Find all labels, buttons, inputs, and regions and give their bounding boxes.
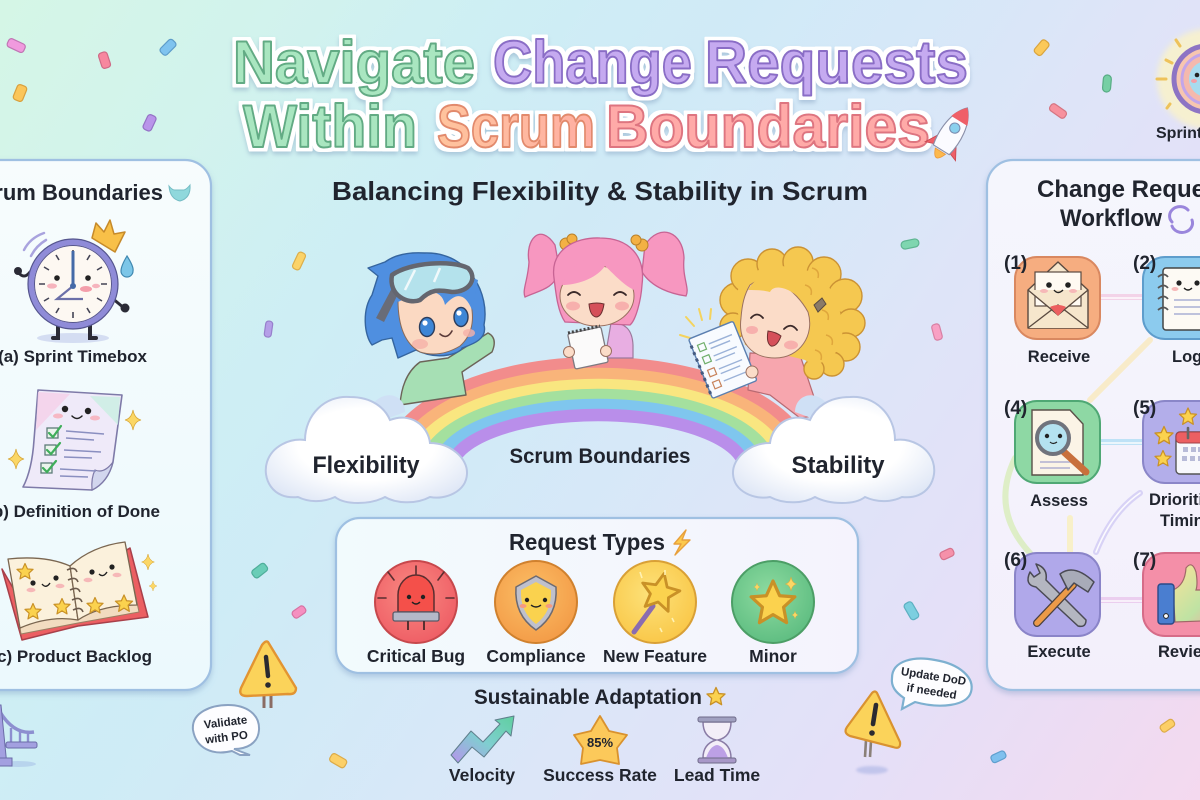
label: sprint timebox: (a) Sprint Timebox	[0, 347, 148, 366]
title: Change	[493, 29, 692, 96]
step 5: prioritize timing	[1133, 398, 1200, 530]
label: New Feature	[603, 646, 707, 666]
label: Success Rate	[543, 765, 657, 785]
cloud: stability	[733, 395, 934, 503]
title: Within	[243, 93, 417, 160]
icon: rocket	[921, 98, 983, 167]
icon: success star 85%: 85%	[587, 735, 613, 750]
number: (6)	[1004, 550, 1027, 571]
label: Execute	[1027, 643, 1091, 661]
callout: update DoD if needed: Update DoD	[900, 666, 967, 688]
step 7: review	[1133, 550, 1200, 661]
label: Velocity	[449, 765, 515, 785]
title: Requests	[705, 29, 968, 96]
title: Scrum	[437, 93, 595, 160]
callout: validate with PO: with PO	[204, 729, 249, 747]
icon: minor star	[732, 561, 814, 643]
icon: success star 85%	[574, 716, 627, 764]
step 4: assess	[1004, 398, 1100, 510]
step 6: execute	[1004, 550, 1100, 661]
number: (2)	[1133, 253, 1156, 274]
heading: sustainable adaptation: Sustainable Adaptation	[474, 686, 702, 709]
panel: scrum boundaries	[0, 160, 211, 690]
icon: critical bug siren	[375, 561, 457, 643]
icon: hourglass lead time	[698, 717, 736, 763]
icon: new feature wand	[614, 561, 696, 643]
icon: warning sign right	[846, 692, 900, 774]
character: pink hair with notepad	[524, 232, 687, 369]
cloud: flexibility	[266, 395, 467, 503]
callout: validate with PO	[193, 705, 259, 755]
subtitle: Balancing Flexibility & Stability in Scrum	[332, 176, 868, 206]
rainbow arch	[404, 358, 792, 460]
callout: validate with PO: Validate	[203, 714, 248, 732]
icon: lightning	[674, 530, 690, 555]
title: Navigate	[233, 29, 475, 96]
icon: warning sign left	[240, 641, 296, 708]
icon: product backlog book	[2, 542, 157, 640]
heading	[1037, 176, 1200, 232]
number: (7)	[1133, 550, 1156, 571]
workflow connectors	[1005, 297, 1150, 601]
label: Critical Bug	[367, 646, 465, 666]
icon: compliance shield	[495, 561, 577, 643]
icon: definition of done checklist	[8, 390, 141, 490]
label: Assess	[1030, 492, 1088, 510]
step 2: log	[1133, 253, 1200, 366]
cloud: flexibility: Flexibility	[312, 452, 420, 479]
heading: Request Types	[509, 529, 665, 555]
icon: velocity arrow	[451, 716, 514, 763]
title: Boundaries	[606, 93, 930, 160]
label: Lead Time	[674, 765, 760, 785]
number: (4)	[1004, 398, 1027, 419]
label: Minor	[749, 646, 797, 666]
step 1: receive	[1004, 253, 1100, 366]
label: scrum boundaries under rainbow: Scrum Boundaries	[510, 445, 690, 468]
character: curly yellow hair with checklist	[680, 247, 865, 418]
number: (1)	[1004, 253, 1027, 274]
label: Compliance	[486, 646, 586, 666]
callout: update DoD if needed: if needed	[906, 682, 957, 702]
character: blue hair with goggles	[365, 253, 494, 405]
icon: sprint timebox clock	[14, 220, 133, 343]
label: Receive	[1028, 348, 1090, 366]
icon: bridge mini	[169, 185, 190, 201]
number: (5)	[1133, 398, 1156, 419]
title	[233, 29, 968, 160]
icon: bridge	[0, 705, 37, 767]
cloud: stability: Stability	[792, 452, 885, 479]
panel: change request workflow	[987, 160, 1200, 690]
callout: update DoD if needed	[892, 659, 972, 709]
heading: Workflow	[1060, 205, 1162, 232]
icon: sprint sun badge	[1156, 29, 1200, 142]
panel: request types	[336, 518, 858, 673]
